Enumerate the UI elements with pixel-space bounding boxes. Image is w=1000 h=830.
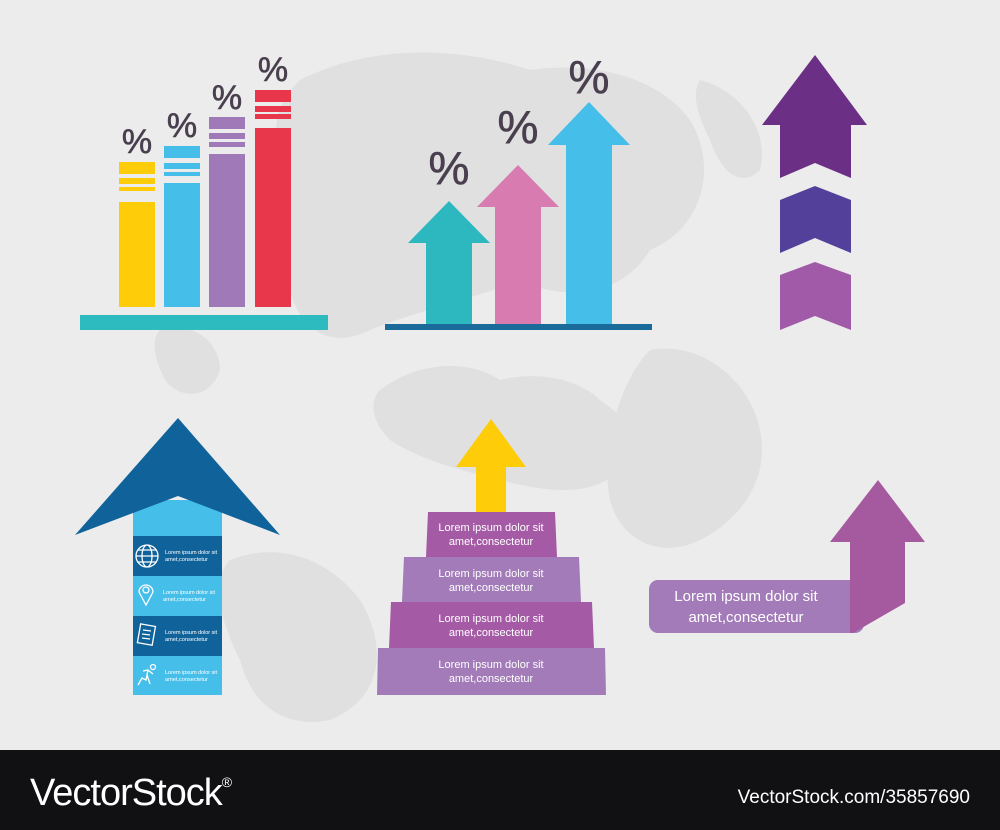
icon list arrow: Lorem ipsum dolor sit (165, 550, 217, 556)
icon list arrow: Lorem ipsum dolor sit (165, 670, 217, 676)
globe background (155, 52, 762, 722)
staircase: amet,consectetur (449, 673, 534, 685)
staircase: Lorem ipsum dolor sit (438, 568, 544, 580)
icon list arrow: amet,consectetur (165, 677, 208, 683)
bent arrow callout (649, 480, 925, 633)
bar chart: % (212, 79, 242, 117)
icon list arrow: Lorem ipsum dolor sit (163, 590, 215, 596)
icon list arrow: Lorem ipsum dolor sit (165, 630, 217, 636)
staircase: Lorem ipsum dolor sit (438, 659, 544, 671)
icon list arrow: amet,consectetur (163, 597, 206, 603)
staircase: Lorem ipsum dolor sit (438, 613, 544, 625)
bar chart: % (167, 107, 197, 145)
staircase: amet,consectetur (449, 536, 534, 548)
arrow chart: % (429, 142, 469, 194)
footer: VectorStock (30, 772, 222, 814)
icon list arrow (75, 418, 280, 695)
staircase: Lorem ipsum dolor sit (438, 522, 544, 534)
staircase (377, 419, 606, 695)
icon list arrow: amet,consectetur (165, 637, 208, 643)
footer: ® (222, 774, 233, 790)
bent arrow callout: amet,consectetur (688, 609, 804, 626)
arrow chart: % (569, 51, 609, 103)
bar chart: % (122, 123, 152, 161)
footer: VectorStock.com/35857690 (738, 787, 970, 808)
staircase: amet,consectetur (449, 627, 534, 639)
bent arrow callout: Lorem ipsum dolor sit (674, 588, 819, 605)
icon list arrow: amet,consectetur (165, 557, 208, 563)
bar chart: % (258, 51, 288, 89)
footer (0, 750, 1000, 830)
bar chart (80, 51, 328, 330)
arrow chart (385, 51, 652, 330)
staircase: amet,consectetur (449, 582, 534, 594)
chevron arrow (762, 55, 867, 330)
arrow chart: % (498, 101, 538, 153)
